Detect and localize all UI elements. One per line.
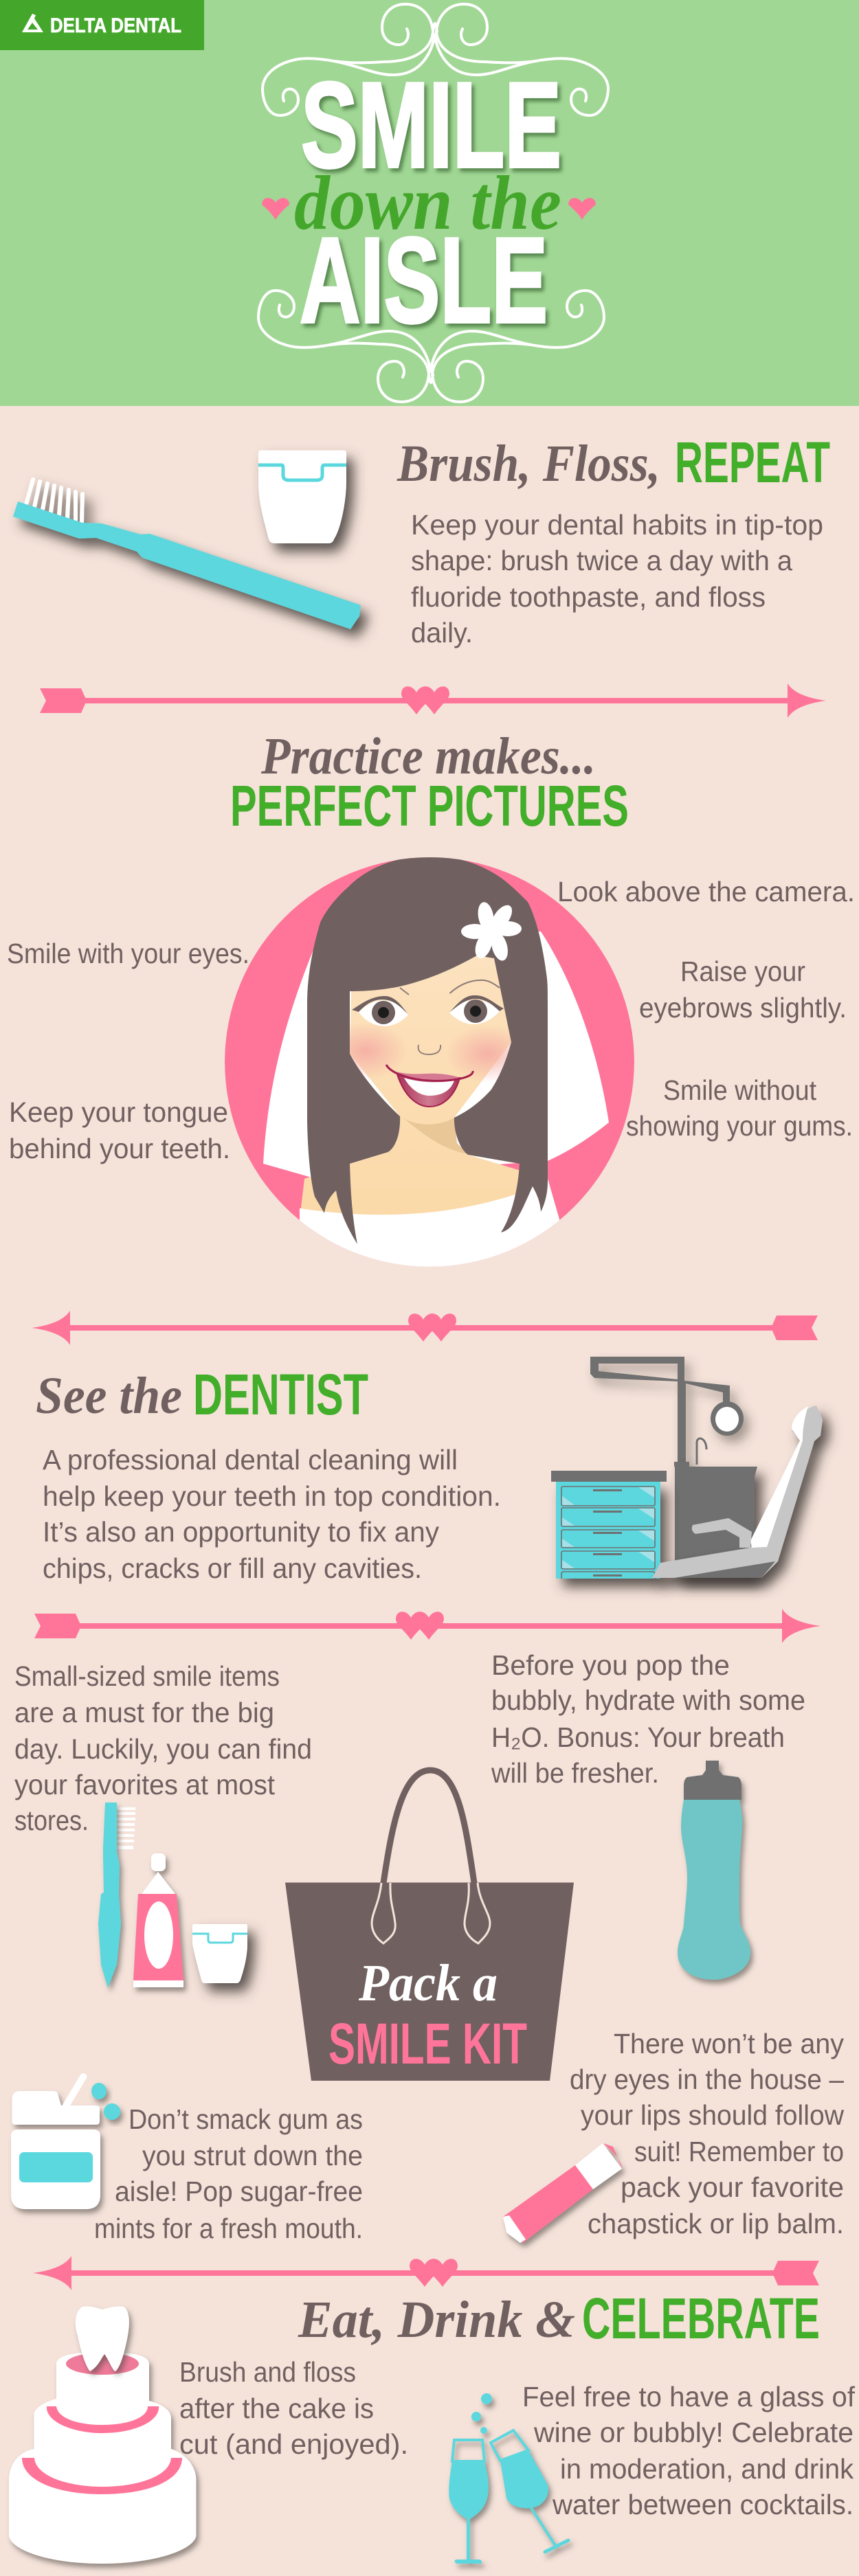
icon: mini toothpaste — [133, 1853, 183, 1987]
skin — [300, 948, 559, 1219]
heading: See the Dentist — [36, 1362, 368, 1427]
heading: See the Dentist: See the — [36, 1367, 182, 1425]
neck shadow — [403, 1118, 468, 1154]
text: toast: water between cocktails. — [552, 2489, 854, 2520]
heading: Practice makes perfect pictures — [230, 727, 629, 838]
heading: See the Dentist: DENTIST — [193, 1362, 368, 1427]
text: cake: Brush and floss — [179, 2356, 356, 2388]
text: portrait tips: eyebrows slightly. — [639, 992, 847, 1024]
text: cake: cut (and enjoyed). — [179, 2428, 408, 2460]
text: portrait tips: Raise your — [680, 956, 805, 987]
text: see the dentist — [43, 1444, 501, 1584]
hair — [307, 856, 548, 1244]
text: toast: Feel free to have a glass of — [522, 2381, 856, 2413]
text: hydrate — [491, 1649, 805, 1789]
text: no gum: mints for a fresh mouth. — [94, 2213, 363, 2244]
bag label: SMILE KIT — [328, 2011, 527, 2076]
text: see the dentist: A professional dental cleaning will — [43, 1444, 458, 1476]
flourish: top — [263, 4, 608, 115]
tooth — [76, 2306, 129, 2371]
text: brush and floss: daily. — [411, 617, 473, 648]
dress — [300, 1179, 559, 1267]
text: toast — [522, 2381, 856, 2520]
text: see the dentist: help keep your teeth in top condition. — [43, 1480, 501, 1512]
text: toast: wine or bubbly! Celebrate — [533, 2417, 854, 2448]
text: lip balm: pack your favorite — [621, 2171, 844, 2203]
veil — [263, 931, 609, 1177]
text: portrait tips: Smile with your eyes. — [7, 938, 249, 969]
sink tower — [674, 1462, 757, 1578]
text: lip balm — [570, 2028, 844, 2239]
arrow: divider 4 — [33, 2256, 819, 2290]
flourish: bottom — [258, 291, 604, 402]
text: toast: in moderation, and drink — [560, 2453, 854, 2485]
text: hydrate: Before you pop the — [491, 1649, 730, 1681]
chair — [652, 1405, 823, 1578]
icon: mini toothbrush — [98, 1803, 135, 1988]
text: brush and floss: shape: brush twice a day with a — [411, 545, 792, 576]
text: lip balm: your lips should follow — [581, 2099, 844, 2131]
title: SMILE — [301, 57, 561, 193]
text: lip balm: suit! Remember to — [634, 2136, 844, 2167]
text: see the dentist: It’s also an opportunity to fix any — [43, 1516, 439, 1548]
text: no gum — [94, 2103, 363, 2244]
logo: Delta Dental — [0, 0, 204, 50]
text: small-sized items: your favorites at most — [14, 1769, 276, 1800]
blush — [350, 1028, 400, 1077]
icon: heart left — [262, 198, 289, 220]
text: small-sized items: day. Luckily, you can find — [14, 1733, 312, 1765]
text: portrait tips: Smile without — [663, 1074, 817, 1106]
icon: floss container — [258, 451, 346, 543]
heading: Brush, Floss, Repeat: Brush, Floss, — [397, 435, 660, 493]
heading: Eat, Drink & Celebrate: Eat, Drink & — [298, 2291, 575, 2349]
heading: Brush, Floss, Repeat — [397, 430, 830, 495]
lamp arm — [590, 1357, 744, 1465]
text: small-sized items — [14, 1660, 312, 1836]
icon: mints — [11, 2077, 120, 2209]
icon: toothbrush — [13, 479, 361, 629]
arrow: divider 2 — [32, 1311, 818, 1345]
nose — [419, 1045, 440, 1054]
text: see the dentist: chips, cracks or fill any cavities. — [43, 1552, 422, 1584]
text: portrait tips: behind your teeth. — [9, 1133, 230, 1164]
icon: water bottle — [678, 1761, 750, 1980]
text: cake — [179, 2356, 408, 2460]
mouth — [386, 1065, 473, 1107]
text: small-sized items: stores. — [14, 1805, 89, 1836]
text: lip balm: chapstick or lip balm. — [588, 2208, 844, 2239]
text: brush and floss: fluoride toothpaste, and floss — [411, 581, 766, 613]
title — [294, 57, 561, 348]
arrow: divider 1 — [40, 683, 826, 718]
icon: bag — [285, 1770, 574, 2081]
text: lip balm: There won’t be any — [614, 2028, 844, 2059]
heading: Practice makes perfect pictures: PERFECT PICTURES — [230, 773, 629, 838]
icon: champagne glasses — [449, 2393, 568, 2564]
text: no gum: aisle! Pop sugar-free — [115, 2176, 363, 2207]
text: portrait tips — [7, 876, 855, 1164]
flower — [461, 901, 522, 962]
text: small-sized items: Small-sized smile items — [14, 1660, 280, 1692]
icon: wedding cake — [9, 2306, 197, 2564]
title: down the — [294, 161, 561, 246]
text: cake: after the cake is — [179, 2393, 374, 2424]
title: AISLE — [300, 212, 548, 348]
text: hydrate: bubbly, hydrate with some — [491, 1684, 805, 1716]
logo: Delta Dental: DELTA DENTAL — [50, 14, 181, 37]
text: no gum: Don’t smack gum as — [129, 2103, 363, 2135]
text: portrait tips: Look above the camera. — [557, 876, 855, 907]
text: portrait tips: Keep your tongue — [9, 1096, 228, 1128]
icon: mini floss — [192, 1924, 247, 1983]
text: hydrate: H₂O. Bonus: Your breath — [491, 1721, 785, 1753]
cabinet — [551, 1471, 667, 1579]
text: lip balm: dry eyes in the house – — [570, 2064, 844, 2095]
arrow: divider 3 — [34, 1609, 821, 1643]
illustration: bride portrait — [225, 856, 634, 1278]
icon: dental chair — [551, 1357, 823, 1579]
eyes — [352, 980, 504, 1026]
icon: heart right — [568, 198, 596, 220]
bag label — [328, 1954, 527, 2076]
text: hydrate: will be fresher. — [491, 1757, 659, 1789]
panel: header — [0, 0, 859, 406]
text: brush and floss: Keep your dental habits in tip-top — [411, 509, 823, 541]
icon: lip balm — [503, 2143, 622, 2243]
heading: Eat, Drink & Celebrate — [298, 2286, 820, 2351]
text: no gum: you strut down the — [142, 2140, 363, 2171]
heading: Practice makes perfect pictures: Practice makes... — [260, 727, 596, 785]
text: small-sized items: are a must for the big — [14, 1697, 274, 1728]
bag label: Pack a — [358, 1954, 498, 2012]
text: brush and floss — [411, 509, 823, 648]
